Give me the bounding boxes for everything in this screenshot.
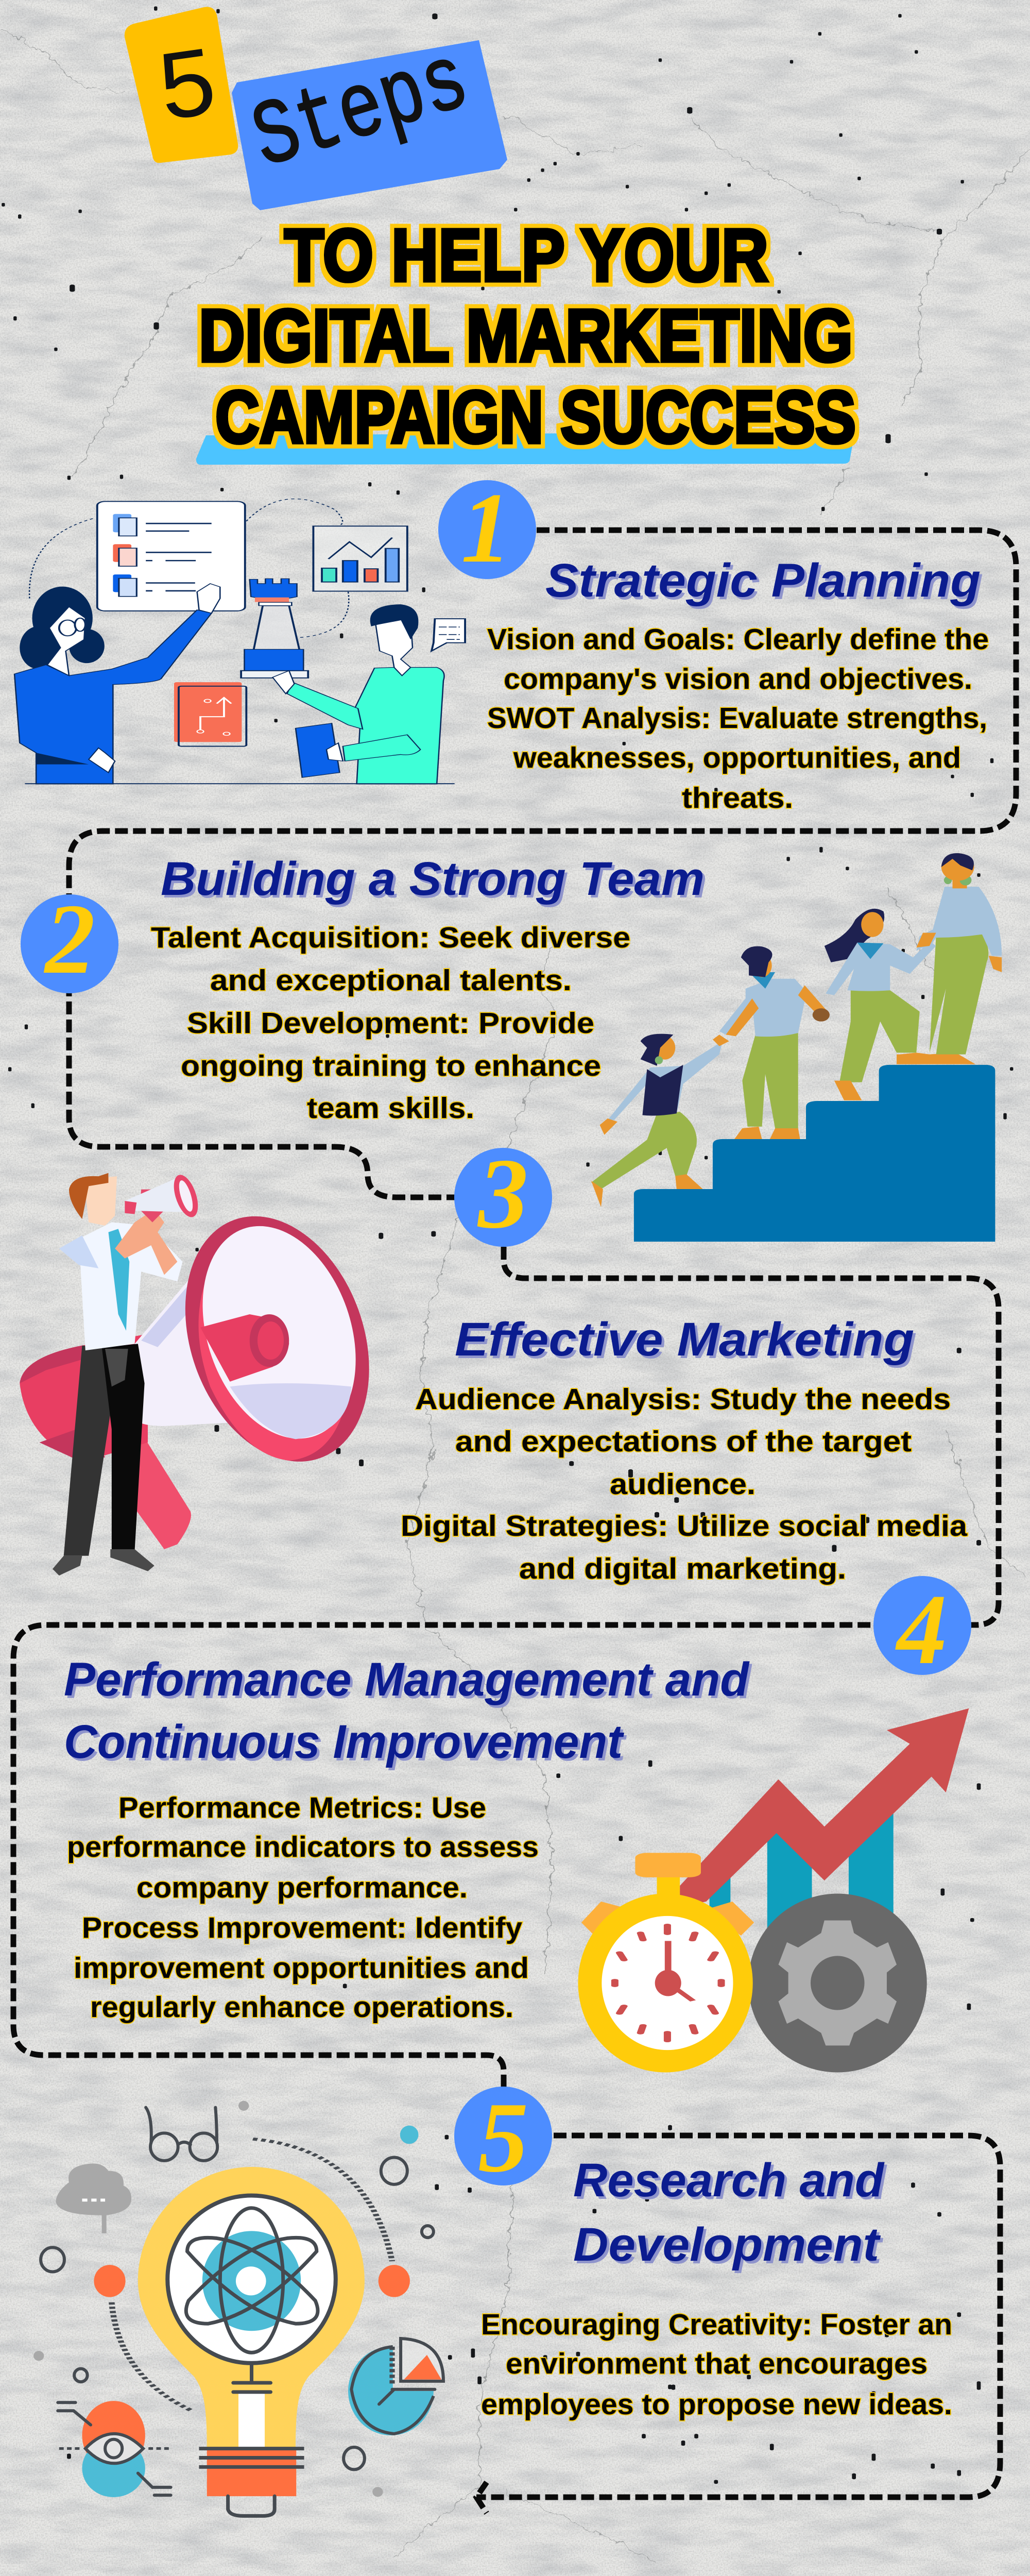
step 4 body text: Process Improvement: Identify [82, 1911, 522, 1944]
lightbulb [138, 2167, 365, 2516]
torso [79, 1222, 183, 1350]
step 1 body text: threats. [682, 782, 793, 815]
step 2 number badge: 2 [43, 884, 95, 995]
step 4 body text: improvement opportunities and [74, 1952, 529, 1985]
person climbing first [591, 1034, 729, 1207]
step 4 body text: regularly enhance operations. [90, 1991, 513, 2024]
step 3 body text: Digital Strategies: Utilize social media [401, 1510, 968, 1543]
step 1 body text: company's vision and objectives. [504, 663, 972, 696]
title underline brush [196, 432, 855, 465]
step 3 number badge [454, 1138, 552, 1249]
step 4 number badge [873, 1574, 971, 1685]
step 3 heading: Effective Marketing [455, 1313, 914, 1366]
step 3 body text: audience. [610, 1468, 756, 1501]
person climbing top [900, 853, 1002, 1064]
step 2 body text: and exceptional talents. [210, 964, 572, 997]
man [272, 604, 465, 784]
title: TO HELP YOUR [284, 214, 768, 297]
step 2 illustration: team climbing stairs [591, 853, 1002, 1242]
step 2 body text [151, 921, 630, 1125]
step 1 body text: weaknesses, opportunities, and [513, 741, 961, 774]
step 5 body text: employees to propose new ideas. [481, 2388, 952, 2421]
step 1 number badge [438, 472, 536, 584]
step 2 heading: Building a Strong Team [161, 853, 705, 905]
step 2 body text: ongoing training to enhance [181, 1049, 601, 1082]
title [199, 214, 856, 459]
chart card [313, 526, 407, 591]
small megaphone [125, 1174, 202, 1218]
step 2 number badge [21, 884, 118, 995]
step 4 heading: Performance Management and [64, 1653, 750, 1706]
stairs [634, 1065, 995, 1242]
chess rook [241, 579, 308, 678]
orange nodes [94, 2265, 410, 2297]
step 4 illustration: growth arrow, stopwatch, gear [578, 1708, 969, 2072]
step 3 body text: Audience Analysis: Study the needs [415, 1383, 951, 1416]
thought cloud [56, 2163, 131, 2233]
title: DIGITAL MARKETING [199, 294, 853, 377]
badge: 5 [125, 7, 238, 163]
tie [108, 1229, 129, 1331]
step 1 heading: Strategic Planning [545, 554, 981, 607]
step 5 body text: Encouraging Creativity: Foster an [481, 2308, 952, 2341]
stopwatch [578, 1853, 754, 2072]
big megaphone [20, 1212, 391, 1549]
step 1 number badge: 1 [461, 472, 511, 584]
step 3 body text: and digital marketing. [519, 1552, 846, 1585]
step 1 illustration: strategy team [14, 499, 465, 784]
step 4 number badge: 4 [895, 1574, 947, 1685]
step 2 body text: team skills. [307, 1092, 474, 1125]
step 4 body text: company performance. [136, 1871, 468, 1904]
step 2 body text: Skill Development: Provide [187, 1007, 594, 1040]
gear [748, 1894, 927, 2072]
dashed connector path with arrow [13, 530, 1016, 2513]
step 5 heading: Development [573, 2218, 881, 2271]
step 4 body text: performance indicators to assess [67, 1831, 539, 1863]
step 5 body text: environment that encourages [506, 2347, 928, 2380]
step 2 body text: Talent Acquisition: Seek diverse [151, 921, 630, 954]
eye icon [58, 2401, 171, 2497]
step 3 body text: and expectations of the target [455, 1425, 912, 1458]
step 5 heading: Research and [573, 2154, 885, 2207]
badge: Steps: Steps [242, 29, 480, 193]
badge: 5: 5 [151, 30, 225, 150]
head [69, 1173, 117, 1226]
step 3 illustration: man with megaphone [20, 1173, 391, 1575]
glasses [146, 2108, 217, 2161]
person climbing second [719, 946, 830, 1139]
step 5 heading [573, 2154, 885, 2271]
step 3 number badge: 3 [477, 1138, 528, 1249]
legs and shoes [53, 1344, 154, 1575]
step 1 body text [487, 623, 989, 815]
step 4 heading: Continuous Improvement [64, 1716, 624, 1768]
woman [14, 584, 220, 784]
step 5 illustration: lightbulb of ideas [33, 2101, 443, 2516]
step 1 body text: SWOT Analysis: Evaluate strengths, [487, 702, 987, 735]
step 5 number badge: 5 [478, 2082, 528, 2193]
arm [115, 1209, 177, 1275]
step 5 body text [481, 2308, 952, 2421]
step 4 body text [67, 1791, 539, 2024]
step 4 heading [64, 1653, 750, 1768]
growth arrow [680, 1708, 969, 1907]
step 5 number badge [454, 2082, 552, 2193]
map card [174, 682, 246, 747]
person climbing third [825, 909, 946, 1100]
dotted arcs [112, 2139, 392, 2411]
title: CAMPAIGN SUCCESS [215, 376, 856, 459]
small rings and dots [33, 2101, 434, 2497]
step 4 body text: Performance Metrics: Use [118, 1791, 486, 1824]
bars [710, 1812, 894, 1930]
step 3 body text [401, 1383, 968, 1585]
step 1 body text: Vision and Goals: Clearly define the [487, 623, 989, 656]
pie chart [348, 2338, 443, 2435]
checklist card [97, 501, 245, 611]
